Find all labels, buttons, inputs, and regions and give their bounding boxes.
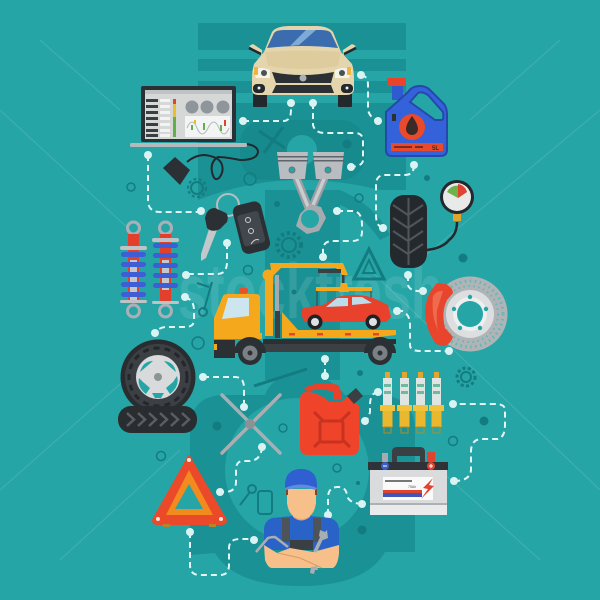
car battery: 75Ah xyxy=(408,485,416,489)
OBD cable xyxy=(163,144,258,185)
tow truck with red car xyxy=(214,263,396,365)
shock absorbers xyxy=(120,222,179,317)
mechanic with wrenches xyxy=(256,469,339,574)
watermark: stockfresh xyxy=(178,247,443,335)
flatbed and chassis xyxy=(263,312,396,352)
wheel with alloy rim and flat tire xyxy=(118,340,197,433)
red car on bed xyxy=(301,295,391,330)
car battery xyxy=(368,447,448,515)
tire tread and pressure gauge xyxy=(390,180,474,268)
ghost outline icons xyxy=(188,127,475,514)
laptop with diagnostics xyxy=(130,86,247,147)
car, front view xyxy=(249,26,356,107)
red jerry can xyxy=(300,383,363,455)
car keys with fob xyxy=(201,194,272,261)
cab xyxy=(214,288,396,358)
oil canister xyxy=(386,78,447,156)
dashed connectors xyxy=(148,75,505,575)
warning triangle xyxy=(153,456,226,527)
crane xyxy=(262,263,372,338)
truck wheels xyxy=(238,341,392,365)
small decorative rings and dots xyxy=(127,140,488,534)
spark plugs xyxy=(380,372,444,433)
brake disc with caliper xyxy=(425,276,508,352)
connector dots xyxy=(144,71,458,544)
engine silhouette background xyxy=(190,23,415,586)
oil canister: 5L xyxy=(432,146,439,152)
cross lug wrench xyxy=(222,395,280,453)
engine pistons xyxy=(277,152,344,234)
